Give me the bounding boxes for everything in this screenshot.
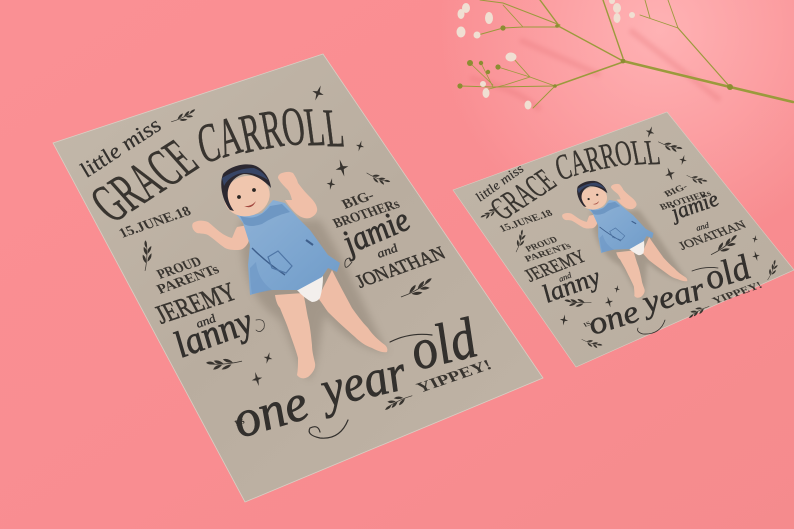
small card date: 15.JUNE.18 bbox=[498, 208, 555, 235]
small card age headline: old bbox=[697, 247, 757, 297]
small card parents block: JEREMY bbox=[520, 247, 591, 286]
small card age headline: IS bbox=[583, 321, 593, 329]
large card date: 15.JUNE.18 bbox=[116, 203, 194, 242]
large card parents block bbox=[149, 254, 264, 366]
large card age headline: one bbox=[224, 375, 316, 449]
large card parents block: PROUD bbox=[154, 254, 205, 283]
twig shadow bbox=[470, 30, 720, 110]
large card age headline: year bbox=[309, 345, 414, 420]
large card siblings block: and bbox=[374, 241, 401, 261]
twig nodes bbox=[457, 24, 733, 90]
large card parents block: PARENTs bbox=[154, 261, 223, 297]
large card age headline: YIPPEY! bbox=[414, 357, 495, 397]
large card siblings block: JONATHAN bbox=[352, 243, 449, 292]
large card sprigs bbox=[135, 109, 434, 410]
small card parents block: and bbox=[557, 270, 574, 284]
baby's breath twig bbox=[456, 0, 793, 110]
small card age headline bbox=[582, 247, 765, 341]
large card stars bbox=[250, 83, 366, 387]
large card parents block: and bbox=[193, 311, 219, 331]
large card siblings block: BROTHERs bbox=[330, 196, 403, 232]
small card parents block: PARENTs bbox=[523, 240, 573, 264]
large card parents block: lanny bbox=[166, 301, 260, 366]
small card siblings block: BROTHERs bbox=[658, 188, 713, 212]
small card name heading bbox=[472, 128, 666, 227]
small card siblings block: jamie bbox=[664, 186, 723, 226]
small card bbox=[453, 112, 794, 367]
small card parents block: lanny bbox=[537, 262, 606, 308]
small card age headline: one bbox=[582, 293, 645, 341]
large card name heading: GRACE bbox=[78, 129, 210, 234]
small card name heading: little miss bbox=[472, 161, 527, 204]
small card siblings block: and bbox=[695, 220, 711, 233]
large card age headline: IS bbox=[233, 416, 247, 428]
twig flowers bbox=[456, 0, 635, 110]
twig stems bbox=[460, 0, 793, 108]
small card parents block bbox=[520, 234, 606, 308]
small card parents block: PROUD bbox=[523, 234, 560, 254]
large card siblings block bbox=[330, 188, 449, 292]
large card age headline bbox=[224, 305, 495, 449]
small card sprigs bbox=[480, 135, 781, 352]
large card name heading: little miss bbox=[74, 113, 166, 182]
large card age headline: old bbox=[401, 305, 485, 382]
small card paper bbox=[453, 112, 794, 367]
small card stars bbox=[559, 125, 761, 326]
large card bbox=[53, 54, 543, 502]
small card age headline: year bbox=[634, 271, 710, 320]
large card baby photo bbox=[192, 164, 388, 380]
small card siblings block: JONATHAN bbox=[676, 218, 749, 253]
large card name heading: CARROLL bbox=[188, 90, 351, 176]
small card siblings block bbox=[658, 182, 749, 253]
small card age headline: YIPPEY! bbox=[710, 280, 765, 307]
small card baby photo bbox=[558, 177, 689, 301]
large card paper bbox=[53, 54, 543, 502]
large card siblings block: jamie bbox=[333, 202, 416, 262]
small card name heading: CARROLL bbox=[548, 128, 666, 189]
small card name heading: GRACE bbox=[483, 163, 564, 227]
small card siblings block: BIG- bbox=[662, 182, 689, 199]
large card parents block: JEREMY bbox=[149, 277, 242, 329]
large card siblings block: BIG- bbox=[339, 188, 377, 213]
